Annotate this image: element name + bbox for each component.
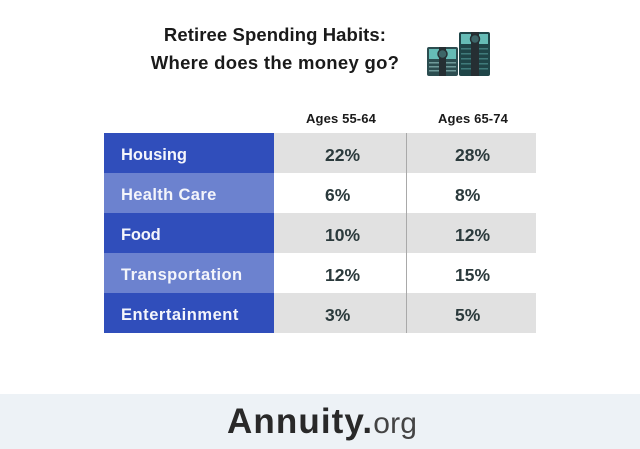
row: health care bbox=[104, 173, 536, 213]
row: health care: 8% bbox=[455, 185, 480, 205]
title: Where does the money go? bbox=[151, 52, 399, 73]
logo: Annuity.org: Annuity.org bbox=[227, 402, 417, 441]
row: entertainment: 3% bbox=[325, 305, 350, 325]
row: entertainment bbox=[104, 293, 536, 333]
row: health care: Health Care bbox=[121, 186, 217, 204]
row: food: 12% bbox=[455, 225, 490, 245]
row: housing: Housing bbox=[121, 146, 187, 164]
row: transportation: 12% bbox=[325, 265, 360, 285]
row: housing: 28% bbox=[455, 145, 490, 165]
row: housing: 22% bbox=[325, 145, 360, 165]
column heading: ages 65-74: Ages 65-74 bbox=[438, 111, 508, 126]
row: housing bbox=[104, 133, 536, 173]
title bbox=[150, 24, 399, 73]
row: entertainment: 5% bbox=[455, 305, 480, 325]
row: food: 10% bbox=[325, 225, 360, 245]
icon: money stacks bbox=[427, 32, 490, 76]
row: food: Food bbox=[121, 226, 161, 244]
row: transportation: 15% bbox=[455, 265, 490, 285]
footer band with logo bbox=[0, 394, 640, 449]
row: transportation: Transportation bbox=[121, 266, 243, 284]
row: food bbox=[104, 213, 536, 253]
row: health care: 6% bbox=[325, 185, 350, 205]
row: entertainment: Entertainment bbox=[121, 306, 239, 324]
column heading: ages 55-64: Ages 55-64 bbox=[306, 111, 376, 126]
title: Retiree Spending Habits: bbox=[164, 24, 386, 45]
row: transportation bbox=[104, 253, 536, 293]
